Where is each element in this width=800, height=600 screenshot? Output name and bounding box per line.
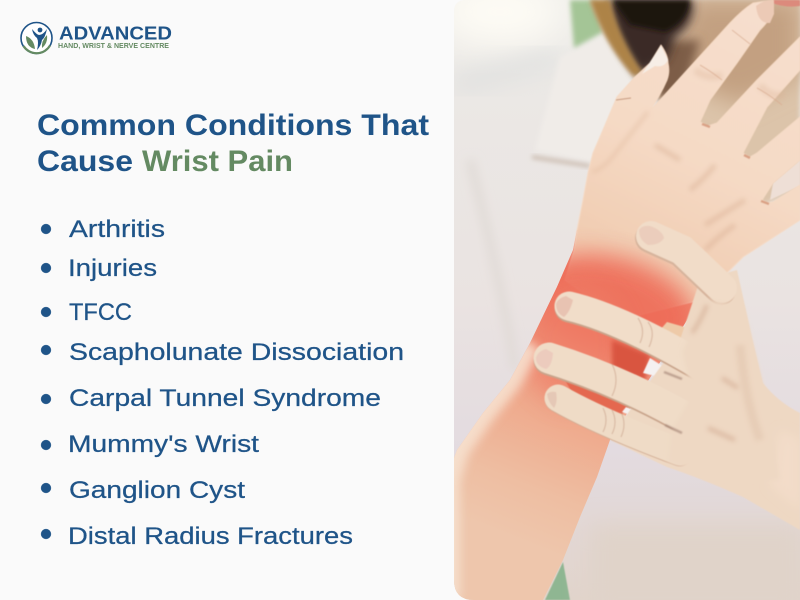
list item: Distal Radius Fractures: Distal Radius Fractures: [68, 523, 353, 550]
photo: woman holding painful wrist: [435, 0, 800, 600]
list item: TFCC: [41, 299, 132, 326]
inflamed redness on wrist: [448, 237, 707, 600]
list item: Ganglion Cyst: Ganglion Cyst: [69, 477, 245, 504]
ring finger shadow: [558, 399, 680, 453]
lower background warm tint: [600, 530, 794, 556]
finger webs: [702, 124, 769, 204]
knuckle creases: [603, 318, 652, 437]
logo wordmark: ADVANCED: [59, 22, 172, 44]
title: Common Conditions That: [37, 109, 429, 142]
index finger: [569, 306, 700, 365]
list item: Injuries: Injuries: [68, 255, 157, 282]
gripping hand: [536, 226, 800, 530]
gripping thumb shadow: [650, 238, 721, 290]
wrist shadow and background between fingers: [566, 322, 684, 414]
list item: Mummy's Wrist: Mummy's Wrist: [68, 431, 259, 458]
list item: Arthritis: Arthritis: [69, 216, 165, 243]
photo background: green foliage: [570, 0, 603, 48]
list item: Injuries: [41, 255, 157, 282]
middle finger shadow: [549, 360, 690, 422]
list item: Scapholunate Dissociation: Scapholunate Dissociation: [69, 339, 404, 366]
index finger shadow: [569, 308, 700, 367]
title: Wrist Pain: [142, 145, 293, 178]
title: [37, 109, 429, 178]
ring finger: [558, 398, 680, 452]
nails: [642, 46, 668, 74]
gripping thumb: [651, 236, 722, 288]
icon: logo emblem: [21, 22, 52, 54]
list item: TFCC: TFCC: [69, 299, 132, 326]
raised hand with fingers: [565, 0, 800, 320]
logo tagline: HAND, WRIST & NERVE CENTRE: [58, 41, 169, 50]
photo background: shirt: [454, 0, 800, 600]
forearm: [454, 230, 693, 600]
pale highlight along forearm edge: [448, 343, 530, 600]
middle finger: [549, 358, 690, 420]
palm and back of gripping hand: [610, 270, 800, 530]
thumb crease: [616, 98, 631, 100]
fingernails: [639, 226, 664, 245]
list item: Arthritis: [41, 216, 165, 243]
palm overlay blending finger bases: [670, 299, 729, 466]
knuckle creases: [700, 30, 782, 105]
photo background: hair: [607, 0, 693, 75]
palm highlight near wrist: [770, 430, 800, 510]
bullet list: conditions: [41, 216, 404, 550]
photo background: gap between lower fingers: [770, 160, 800, 200]
hand silhouette: [565, 0, 800, 320]
title: Cause: [37, 145, 133, 178]
list item: Carpal Tunnel Syndrome: Carpal Tunnel Syndrome: [69, 385, 381, 412]
photo background: neck and face: [590, 0, 800, 205]
logo: [21, 22, 172, 54]
